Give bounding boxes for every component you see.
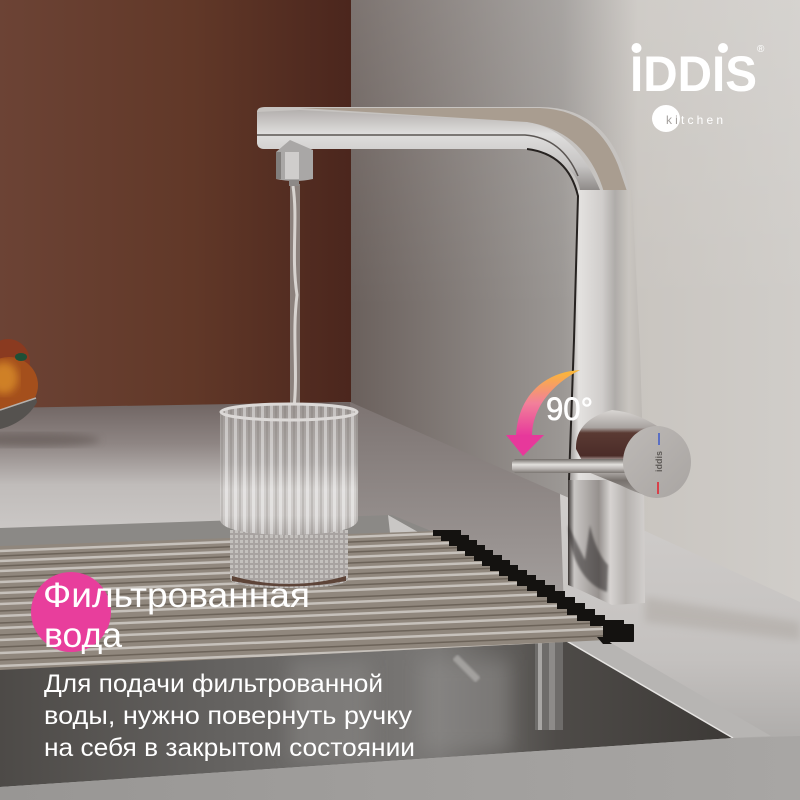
kitchen word: ki tchen [666,113,723,127]
front counter [0,736,800,800]
sink front rim [0,515,436,550]
back fruit [0,339,30,385]
basin drain pipe reflection [535,640,563,730]
glass foot [230,530,348,588]
brand name: IDDIS [630,46,757,102]
hot mark [657,482,659,494]
cold mark [658,433,660,445]
title: вода [44,616,123,655]
leaf [15,353,27,361]
background: grey wall [350,0,800,620]
handle disc [623,426,691,498]
fruit bowl [0,339,100,447]
handle logo: iddis [654,451,664,472]
drying rack [0,531,603,670]
aerator [276,140,313,186]
sink right rim [565,640,771,738]
lever [512,459,626,473]
registered mark: ® [757,44,765,55]
lower body [568,480,645,605]
faucet silhouette [257,107,645,605]
basin reflections [290,660,510,760]
title [43,576,310,655]
description: на себя в закрытом состоянии [44,734,415,762]
glass body [220,404,358,535]
spout dark line [257,135,578,176]
spout tube [257,110,600,190]
rotation arrow [506,370,580,456]
basin highlight [455,657,478,680]
glass foot shadow [232,576,346,586]
sink basin [0,640,733,787]
glass [220,404,358,588]
title: Фильтрованная [43,576,310,615]
description: Для подачи фильтрованной [44,670,383,698]
description [44,670,415,762]
arrow arc [516,370,580,436]
spout reflection [300,108,630,200]
peach [0,357,38,413]
accent circle [31,572,111,652]
bowl shadow [0,433,100,447]
countertop right [560,494,800,770]
handle cylinder [576,410,657,498]
upright dark edge [527,149,578,480]
countertop middle [350,402,600,640]
bowl [0,398,37,429]
faucet [257,107,645,605]
arrow head [506,435,544,456]
sink rim corner [388,515,418,533]
mixer handle [512,410,691,498]
upright [568,190,644,480]
drying rack rubber feet [433,530,634,644]
background: brown wall panel [0,0,351,409]
counter shadow band [645,597,800,640]
countertop left [0,402,420,540]
kitchen blob [652,105,680,132]
description: воды, нужно повернуть ручку [44,702,413,730]
logo [630,43,765,132]
water stream [290,184,300,408]
angle label: 90° [546,391,593,427]
glass rim [221,404,357,420]
fan reflection [568,525,608,592]
letter dots [632,43,642,53]
